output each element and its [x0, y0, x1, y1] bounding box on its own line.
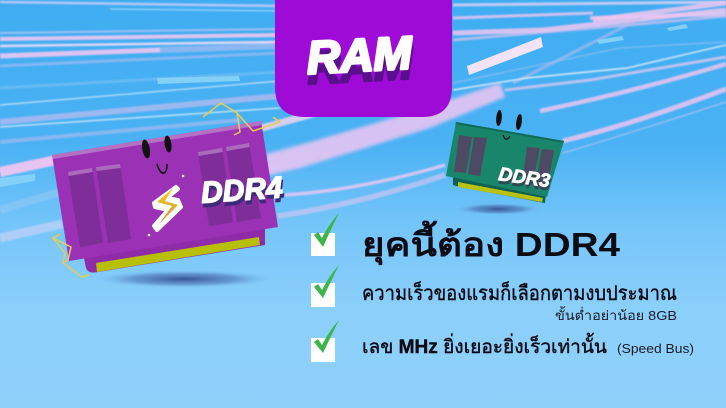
module lower edge	[84, 226, 265, 272]
upper left	[0, 2, 280, 6]
gold contacts	[458, 182, 543, 202]
module body	[446, 122, 564, 197]
line 2: เลข MHz ยิ่งเยอะยิ่งเร็วเท่านั้น	[362, 333, 607, 358]
background band: large pink stroke	[266, 83, 505, 176]
label: DDR4: DDR4	[200, 171, 284, 210]
title text: RAM: RAM	[305, 26, 415, 84]
checklist	[311, 213, 694, 362]
icon: lightning bolt	[148, 175, 184, 236]
ram module: DDR4	[52, 103, 285, 288]
title text: RAM: RAM	[306, 36, 415, 94]
background light streaks	[0, 2, 726, 238]
sparks	[53, 103, 280, 277]
shadow	[456, 203, 540, 215]
ram module: DDR3	[446, 110, 564, 215]
background cyan bars	[0, 24, 688, 187]
memory chips	[454, 135, 554, 190]
module body	[52, 121, 278, 261]
right middle	[540, 64, 726, 111]
line 1 note: ขั้นต่ำอย่าน้อย 8GB	[555, 306, 677, 323]
module lower edge	[453, 176, 546, 203]
top right	[453, 2, 726, 5]
background highlighted bar	[467, 37, 543, 75]
label: DDR3: DDR3	[497, 164, 552, 192]
check item 1	[311, 213, 339, 256]
center thin streaks	[285, 165, 445, 195]
memory chips	[68, 143, 261, 247]
label: DDR4: DDR4	[201, 175, 285, 214]
check item 2	[311, 265, 339, 307]
body top band	[52, 121, 262, 159]
check item 3	[311, 320, 339, 362]
left of module	[0, 160, 56, 172]
line 1: ความเร็วของแรมก็เลือกตามงบประมาณ	[362, 280, 677, 305]
title tab	[275, 0, 452, 117]
between module and tab	[262, 112, 320, 128]
shadow	[96, 270, 272, 288]
heading: ยุคนี้ต้อง DDR4	[362, 220, 621, 266]
face	[141, 135, 173, 173]
face	[496, 110, 523, 139]
label: DDR3: DDR3	[498, 167, 552, 195]
gold contacts	[96, 237, 260, 272]
line 2 note: (Speed Bus)	[617, 341, 694, 356]
